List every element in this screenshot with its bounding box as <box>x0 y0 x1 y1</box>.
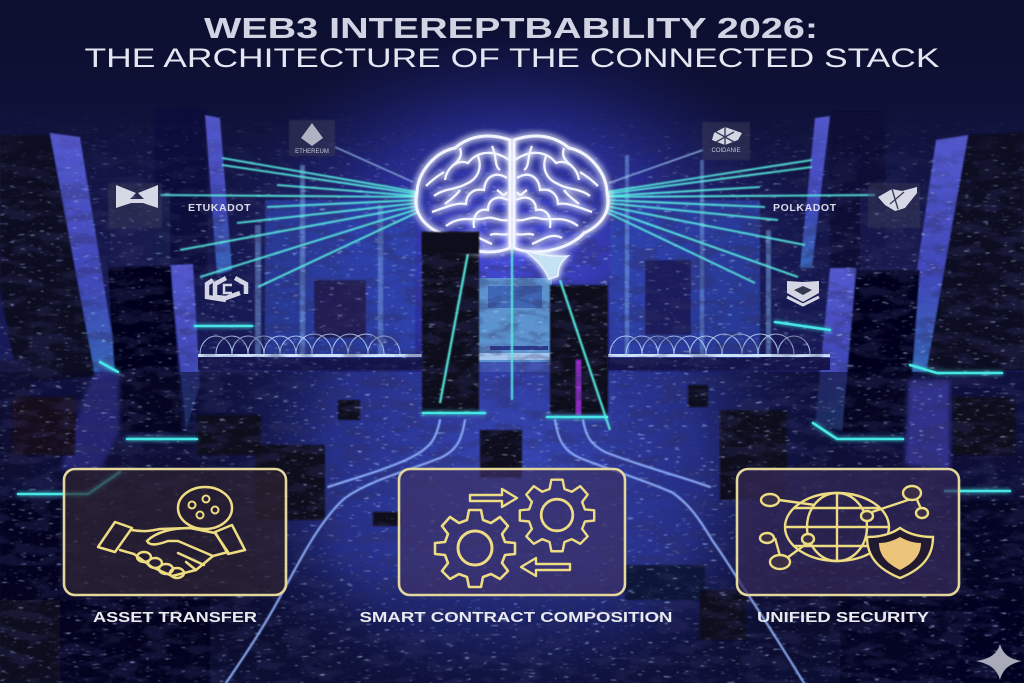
icon: handshake with token coin <box>98 487 245 578</box>
title: THE ARCHITECTURE OF THE CONNECTED STACK <box>84 43 940 73</box>
logo: Etukadot: ETUKADOT <box>188 202 251 214</box>
logo: layered shield <box>787 281 819 305</box>
logo: Ethereum: ETHEREUM <box>295 149 329 155</box>
title: WEB3 INTEREPTBABILITY 2026: <box>204 13 818 45</box>
bridge with arches <box>198 334 830 370</box>
logo: Coinbase style <box>702 122 750 160</box>
caption: asset transfer: ASSET TRANSFER <box>93 609 257 626</box>
logo: Etukadot <box>108 183 251 228</box>
central lit building <box>478 278 552 422</box>
distant skyline <box>110 108 920 360</box>
right towers <box>800 116 1024 432</box>
caption: smart contract composition: SMART CONTRACT COMPOSITION <box>360 609 672 626</box>
caption: unified security: UNIFIED SECURITY <box>757 609 929 626</box>
network rays from brain to protocols <box>160 147 875 430</box>
central towers <box>422 232 608 415</box>
panel: asset transfer <box>64 469 286 595</box>
logo: Ethereum <box>289 120 335 156</box>
title <box>84 13 940 73</box>
panel: smart contract composition <box>399 469 625 595</box>
icon: gears and arrows <box>435 480 594 587</box>
logo: Coinbase style: COIDANIE <box>711 148 741 154</box>
city ground <box>0 362 1024 683</box>
logo: Polkadot: POLKADOT <box>773 202 837 214</box>
icon: sparkle watermark <box>976 644 1022 680</box>
central tower roof <box>422 232 479 254</box>
brain hologram <box>416 136 608 279</box>
icon: globe network and shield <box>760 486 933 578</box>
neon streets <box>18 322 1010 683</box>
left towers <box>0 115 232 480</box>
logo: Polkadot <box>773 183 920 228</box>
panel: unified security <box>737 469 959 595</box>
logo: hex C <box>207 278 246 300</box>
